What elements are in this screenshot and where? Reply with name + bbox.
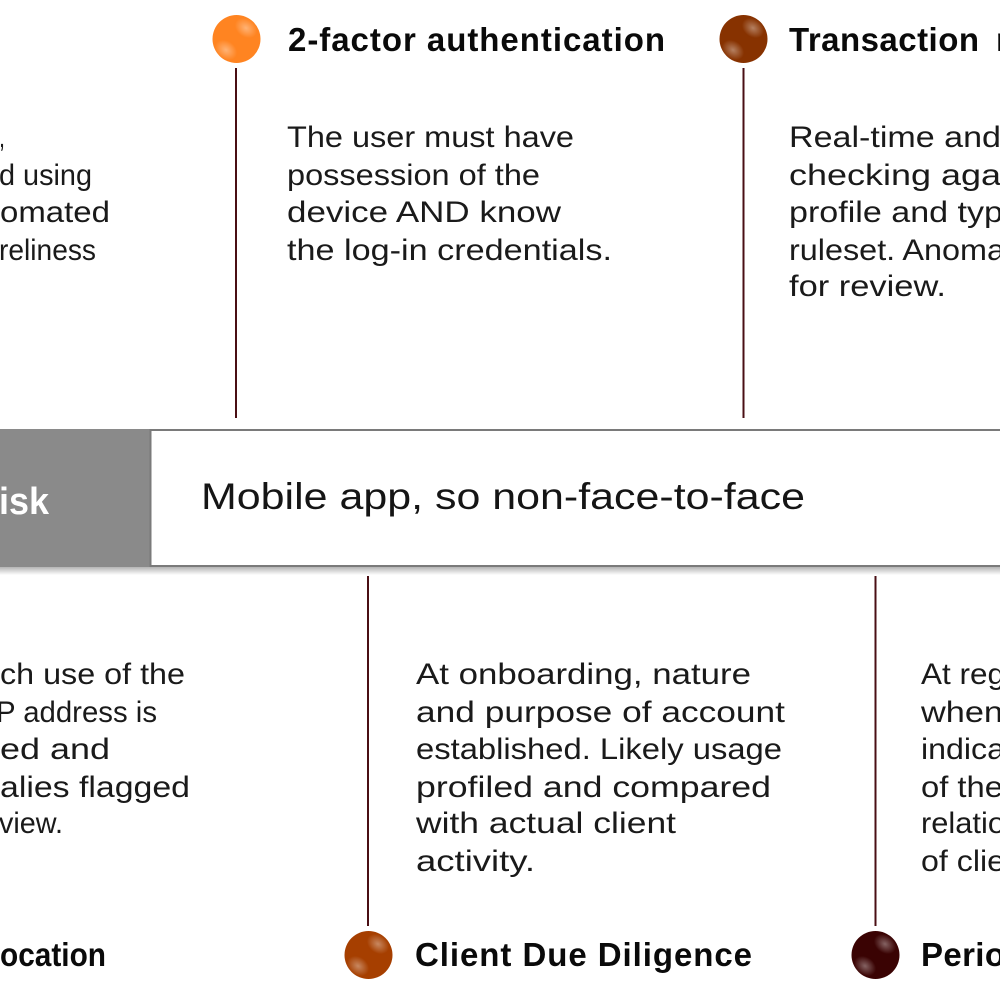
text block: upper left: d using	[0, 159, 92, 192]
heading: transaction monitoring: Transaction	[789, 21, 979, 58]
text block: location: alies flagged	[0, 771, 190, 804]
banner shadow	[0, 567, 1000, 575]
text block: client due diligence: established. Likely usage	[416, 733, 782, 766]
text block: client due diligence: activity.	[416, 845, 535, 878]
risk label: isk	[0, 481, 50, 523]
text block: 2-factor authentication: device AND know	[287, 196, 561, 229]
connector line: periodic review	[874, 576, 876, 926]
connector line: client due diligence	[367, 576, 369, 926]
text block: periodic review: of the	[921, 771, 1000, 804]
text block: location: P address is	[0, 696, 157, 729]
text block: 2-factor authentication: possession of the	[287, 159, 540, 192]
text block: client due diligence: and purpose of account	[416, 696, 786, 729]
text block: periodic review: when	[920, 696, 1000, 729]
heading: 2-factor authentication: 2-factor authentication	[288, 21, 665, 58]
connector line: transaction monitoring	[742, 68, 744, 418]
text block: transaction monitoring: Real-time and	[789, 121, 1000, 154]
text block: periodic review	[920, 658, 1000, 878]
icon: brown sphere	[718, 14, 768, 64]
text block: client due diligence: profiled and compared	[416, 771, 771, 804]
text block: upper left: reliness	[0, 234, 96, 267]
risk description box	[150, 430, 1000, 566]
text block: location: view.	[0, 807, 63, 840]
icon: dark maroon sphere	[850, 930, 900, 980]
icon: rust sphere	[343, 930, 393, 980]
text block: transaction monitoring: profile and typ	[789, 196, 1000, 229]
text block: 2-factor authentication	[287, 121, 612, 267]
text block: periodic review: At reg	[921, 658, 1000, 691]
text block: transaction monitoring: ruleset. Anoma	[789, 234, 1000, 267]
risk label panel	[0, 429, 150, 567]
text block: location: ch use of the	[0, 658, 185, 691]
text block: client due diligence: with actual client	[415, 807, 677, 840]
icon: orange sphere	[211, 14, 261, 64]
text block: client due diligence: At onboarding, nature	[416, 658, 751, 691]
text block: client due diligence	[415, 658, 786, 878]
risk description: Mobile app, so non-face-to-face	[201, 476, 805, 517]
text block: 2-factor authentication: the log-in credentials.	[287, 234, 612, 267]
text block: upper left: omated	[0, 196, 110, 229]
text block: location	[0, 658, 190, 840]
risk banner	[0, 429, 1000, 575]
text block: periodic review: of clie	[921, 845, 1000, 878]
heading: location: ocation	[0, 936, 106, 973]
text block: upper left	[0, 121, 110, 267]
text block: transaction monitoring: for review.	[789, 270, 946, 303]
text block: location: ed and	[0, 733, 110, 766]
text block: transaction monitoring	[789, 121, 1000, 303]
text block: transaction monitoring: checking aga	[789, 159, 1000, 192]
connector line: 2-factor authentication	[235, 68, 237, 418]
heading: client due diligence: Client Due Diligence	[415, 936, 752, 973]
text block: periodic review: indica	[921, 733, 1000, 766]
text block: 2-factor authentication: The user must have	[287, 121, 574, 154]
